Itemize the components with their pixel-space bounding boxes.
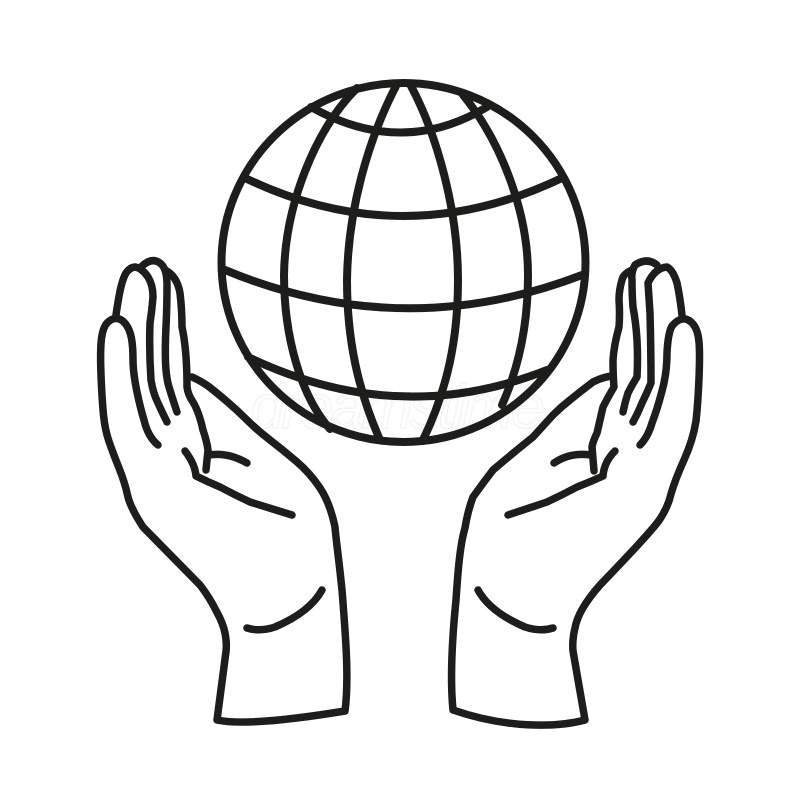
left wrist crease xyxy=(247,590,322,630)
right middle finger xyxy=(623,261,657,412)
globe longitude lines xyxy=(284,86,528,440)
left middle finger xyxy=(142,261,177,412)
globe outline xyxy=(222,83,586,442)
left thumb crease xyxy=(209,454,247,463)
icon: wireframe globe xyxy=(222,83,586,442)
watermark: dreamstime xyxy=(250,373,545,442)
left hand outline xyxy=(101,318,347,722)
left ring finger and palm edge xyxy=(165,270,208,470)
left index finger xyxy=(116,267,167,422)
right ring finger and palm edge xyxy=(592,270,632,471)
right thumb crease xyxy=(554,454,591,463)
icon: left hand xyxy=(101,261,347,722)
right hand outline xyxy=(452,319,700,725)
icon: right hand xyxy=(452,261,700,725)
right palm crease xyxy=(508,451,615,515)
right wrist crease xyxy=(478,590,553,630)
right index finger xyxy=(633,267,682,422)
left palm crease xyxy=(185,451,292,515)
globe latitude lines xyxy=(225,107,582,397)
